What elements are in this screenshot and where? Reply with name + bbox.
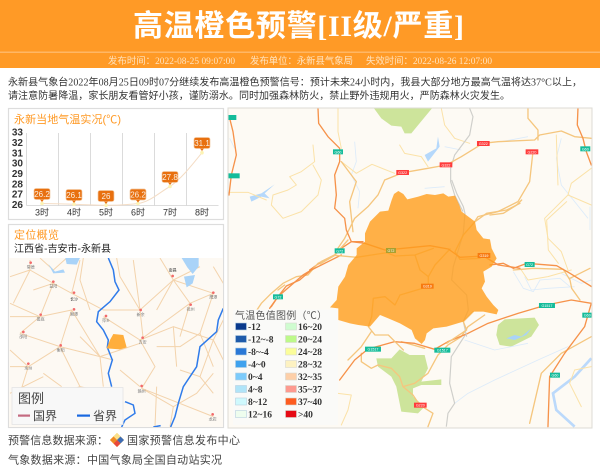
weather data source: 气象数据来源：中国气象局全国自动站实况 [8,452,222,466]
road labels lower: G60 [552,374,558,378]
legend labels: -12~-8 [248,336,274,346]
road labels upper: G322 [398,171,407,175]
legend labels: 0~4 [248,373,263,383]
line chart: 28 [12,180,23,190]
legend left column [236,323,246,418]
line chart: 8时 [195,206,209,218]
road labels upper: G72 [526,263,533,267]
legend labels: 12~16 [248,410,272,420]
line chart [12,128,218,218]
line chart: 29 [12,169,23,180]
road labels lower: G1517 [437,349,448,353]
legend title: 气温色值图例（℃） [235,309,327,322]
road labels upper: G322 [442,163,450,167]
legend labels: -8~-4 [248,348,269,358]
map legend: 省界 [93,409,117,423]
east map features [490,200,592,300]
legend labels: 32~35 [298,373,322,383]
line chart: 33 [12,128,23,138]
legend labels: 16~20 [298,323,322,333]
line chart: 27.8 [162,173,178,182]
city names: 邵阳 [19,333,27,339]
city names: 萍乡 [102,317,110,323]
Yongxin county warning area [330,191,498,344]
map legend: 图例 [18,391,44,406]
title: 高温橙色预警[II级/严重] [133,10,464,43]
city names: 娄底 [37,316,45,322]
central road network [320,180,520,350]
city names: 南昌 [169,266,177,272]
warning data source: 预警信息数据来源： [8,433,108,447]
city names: 长沙 [70,296,78,302]
legend labels: 20~24 [298,336,322,346]
temperature color legend [233,309,338,425]
map legend: 国界 [33,409,57,423]
lower map features [271,270,591,427]
line chart: 26.2 [130,190,146,200]
city names: 常德 [27,264,35,270]
city names: 湘潭 [70,310,78,316]
line chart: 27 [12,190,23,200]
road labels upper: G60 [582,147,589,151]
city names: 益阳 [49,283,57,289]
city names: 吉安 [139,339,147,345]
publishing unit: 发布单位：永新县气象局 [250,55,353,67]
warning data source [8,433,240,447]
lake [48,258,199,287]
city names: 新余 [137,311,145,317]
city names: 赣州 [138,387,146,393]
panel: detailed county map [228,108,592,428]
road labels upper: G72 [388,249,394,253]
expiry time: 失效时间：2022-08-26 12:07:00 [366,55,492,67]
upper map features [228,108,591,270]
legend labels: >40 [298,410,313,420]
header banner [0,0,600,68]
panel: location overview [8,224,224,428]
warning description text [8,76,582,102]
legend labels [248,323,322,420]
icon: national warning center logo [110,433,124,447]
chart heading: 永新当地气温实况(℃) [14,112,121,126]
city names: 衡阳 [57,346,65,352]
road labels upper: G60 [335,150,341,154]
city names: 抚州 [187,306,195,312]
line chart: 5时 [99,206,113,218]
line chart: 6时 [131,206,145,218]
road labels lower: G60 [584,314,591,318]
publish time: 发布时间：2022-08-25 09:07:00 [108,55,235,67]
road labels upper: G322 [479,142,488,146]
line chart: 26.1 [66,191,82,200]
location path: 江西省-吉安市-永新县 [14,242,111,255]
city names [19,264,217,421]
line chart: 30 [12,158,23,170]
line chart: 32 [12,138,23,149]
road labels lower: G1517 [367,348,378,352]
road labels lower [273,284,592,408]
line chart: 26 [102,192,111,201]
legend labels: 24~28 [298,348,322,358]
line chart: 26.2 [34,190,50,199]
legend labels: 28~32 [298,360,322,370]
road labels upper: G220 [527,150,536,154]
road labels upper [228,115,590,267]
line chart: 4时 [67,206,81,218]
locator map [9,258,223,427]
legend labels: 4~8 [248,386,263,396]
west map features [255,240,348,313]
city names: 永州 [24,365,32,371]
legend labels: 8~12 [248,398,267,408]
warning data source: 国家预警信息发布中心 [127,433,240,447]
map legend [12,388,123,424]
road labels lower: G319 [423,285,432,289]
line chart: 3时 [35,206,49,218]
road labels lower: G72 [275,295,281,299]
legend labels: 35~37 [298,386,322,396]
legend labels: 37~40 [298,398,322,408]
line chart: 31.1 [194,139,210,148]
line chart: 7时 [163,206,177,218]
city names: 鹰潭 [209,294,217,300]
line chart: 31 [12,148,23,160]
Yongxin county [107,334,127,349]
road labels lower: G220 [416,404,425,408]
panel: local temperature chart [8,108,224,220]
legend labels: -4~0 [248,360,266,370]
road labels upper: G72 [336,249,343,253]
line chart: 26 [12,200,23,211]
road labels lower: G1517 [541,304,552,308]
city markers [22,261,215,416]
legend labels: -12 [248,323,261,333]
road labels upper: G319 [479,254,488,258]
warning description text: 请注意防暑降温，家长朋友看管好小孩，谨防溺水。同时加强森林防火，禁止野外违规用火，严防森林火灾发生。 [8,89,510,102]
location heading: 定位概览 [14,228,59,242]
province border [97,258,223,427]
warning description text: 永新县气象台2022年08月25日09时07分继续发布高温橙色预警信号：预计未来24小时内，我县大部分地方最高气温将达37°C以上， [8,76,582,88]
city names: 龙岩 [209,415,217,421]
legend right column [286,323,296,418]
